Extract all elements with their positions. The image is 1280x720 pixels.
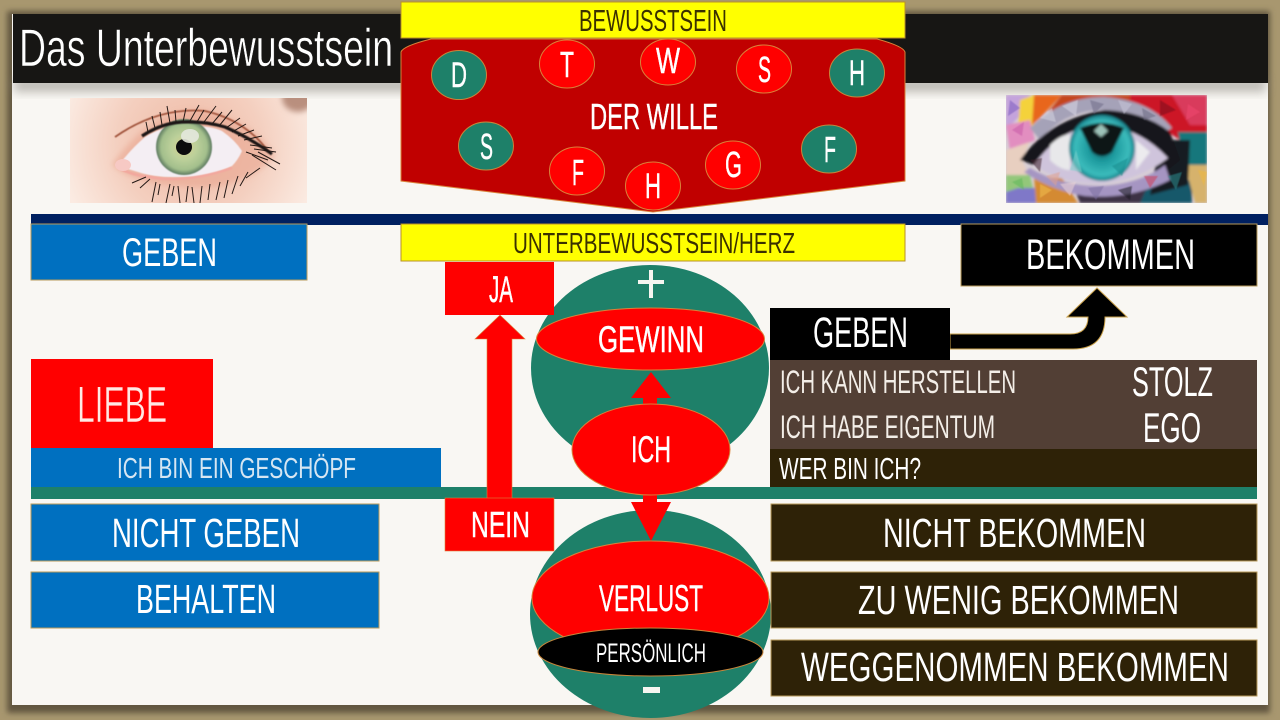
circle S <box>736 45 792 93</box>
circle: lower green sphere <box>530 510 771 718</box>
box: GEBEN black <box>770 308 950 360</box>
box: Ja: JA <box>489 269 513 310</box>
panel: der Wille <box>401 39 905 212</box>
box: Liebe: LIEBE <box>77 376 167 433</box>
divider: green bar <box>31 487 1257 499</box>
circle F: F <box>572 152 584 193</box>
sign: plus <box>638 270 664 298</box>
text: Ich kann herstellen: ICH KANN HERSTELLEN <box>780 364 1016 400</box>
box: BEKOMMEN: BEKOMMEN <box>1026 231 1195 279</box>
box: Unterbewusstsein/Herz: UNTERBEWUSSTSEIN/HERZ <box>513 228 795 260</box>
circle F <box>550 147 604 195</box>
arrow: down to Verlust <box>631 490 671 541</box>
circle: upper green sphere <box>531 265 769 471</box>
divider: navy bar <box>31 214 1268 225</box>
circle S: S <box>758 49 771 90</box>
box: GEBEN black: GEBEN <box>813 309 908 357</box>
box: Behalten: BEHALTEN <box>136 576 276 622</box>
ellipse: Verlust <box>532 541 769 655</box>
box: Nein: NEIN <box>471 504 530 545</box>
arrow: up to Gewinn <box>631 372 671 410</box>
photo: polygonal colourful eye <box>1006 95 1207 203</box>
circle G: G <box>725 144 742 185</box>
sign: minus <box>643 687 660 693</box>
text: Ego: EGO <box>1143 404 1201 451</box>
text: Ich habe Eigentum: ICH HABE EIGENTUM <box>780 409 995 445</box>
circle F green: F <box>824 129 836 170</box>
box: Nicht geben: NICHT GEBEN <box>112 510 300 556</box>
text: Stolz: STOLZ <box>1132 358 1213 405</box>
box: BEWUSSTSEIN: BEWUSSTSEIN <box>579 3 727 38</box>
box: Nicht bekommen: NICHT BEKOMMEN <box>883 510 1146 556</box>
circle W: W <box>656 40 680 81</box>
ellipse: Ich: ICH <box>631 429 671 470</box>
circle F green <box>802 125 856 173</box>
box: GEBEN left <box>31 224 307 280</box>
ellipse: Gewinn <box>536 308 764 370</box>
box: BEKOMMEN <box>961 224 1257 286</box>
circle S green <box>458 122 514 170</box>
title: Das Unterbewusstsein <box>19 19 393 78</box>
circle D <box>432 50 486 100</box>
arrow: Geben to Bekommen <box>950 288 1127 349</box>
circle T <box>540 40 594 88</box>
ellipse: Verlust: VERLUST <box>599 578 703 619</box>
box: Ich bin ein Geschoepf <box>31 448 441 487</box>
box: Nicht geben <box>31 504 379 561</box>
circle S green: S <box>480 126 493 167</box>
box: Ich bin ein Geschoepf: ICH BIN EIN GESCHÖPF <box>117 453 356 485</box>
box: Nein <box>445 498 554 551</box>
box: Liebe <box>31 359 213 449</box>
box: Wer bin ich: WER BIN ICH? <box>779 451 921 486</box>
box: Zu wenig bekommen <box>771 572 1257 628</box>
box: Unterbewusstsein/Herz <box>401 224 905 261</box>
label: der Wille: DER WILLE <box>590 96 718 137</box>
photo: natural green eye <box>70 98 307 203</box>
box: GEBEN left: GEBEN <box>122 231 217 275</box>
ellipse: persoenlich: PERSÖNLICH <box>596 638 706 668</box>
circle T: T <box>560 44 574 85</box>
box: BEWUSSTSEIN <box>401 2 905 38</box>
arrow: Nein to Ja <box>475 315 525 499</box>
ellipse: persoenlich <box>538 628 763 676</box>
box: Ja <box>445 262 554 315</box>
circle W <box>640 39 696 85</box>
ellipse: Gewinn: GEWINN <box>598 319 704 360</box>
box: Behalten <box>31 572 379 628</box>
circle G <box>706 141 760 189</box>
circle D: D <box>451 56 467 95</box>
circle H <box>830 49 884 97</box>
circle H: H <box>849 54 865 93</box>
panel: Stolz und Ego <box>770 358 1257 451</box>
circle H red <box>626 162 680 210</box>
ellipse: Ich <box>572 404 730 495</box>
circle H red: H <box>645 167 661 206</box>
box: Nicht bekommen <box>771 504 1257 561</box>
box: Wer bin ich <box>770 449 1257 487</box>
header bar <box>13 14 1268 92</box>
